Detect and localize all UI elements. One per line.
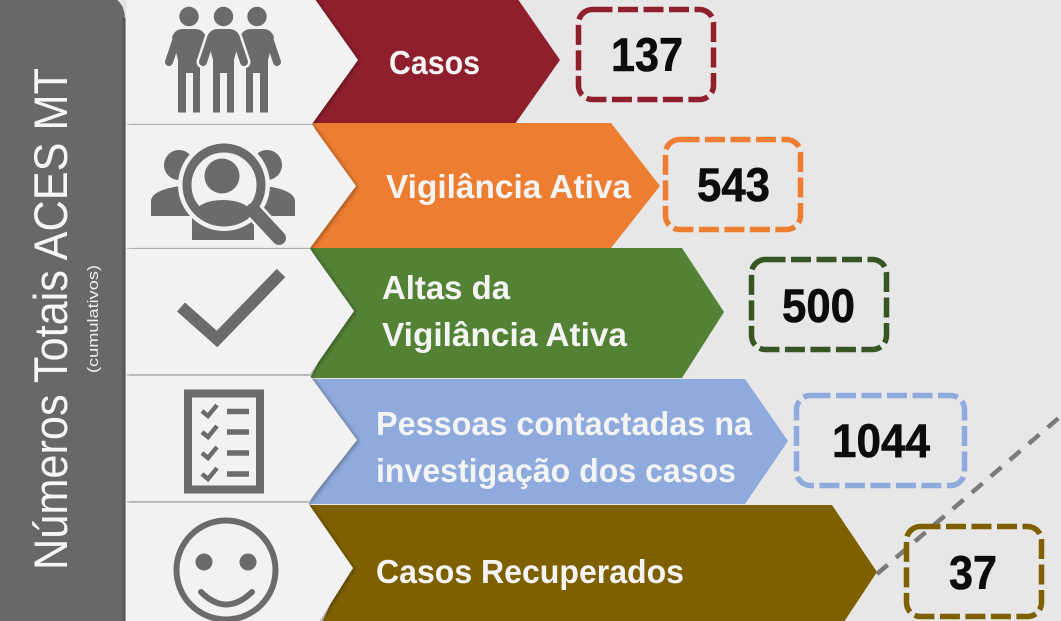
row background: Recuperados (126, 503, 353, 621)
label: Casos: Casos (389, 44, 480, 81)
arrow: Pessoas contactadas (309, 379, 788, 504)
label: Casos Recuperados: Casos Recuperados (376, 553, 684, 590)
arrow: Casos (312, 0, 560, 124)
callout: 500: 500 (782, 279, 855, 332)
panel title: Números Totais ACES MT (24, 68, 77, 570)
label: Vigilância Ativa: Vigilância Ativa (386, 168, 632, 205)
callout: 500 (752, 260, 886, 350)
label: Altas da Vigilância Ativa: Vigilância Ativa (382, 316, 628, 353)
callout: 1044 (796, 396, 964, 486)
label: Pessoas contactadas na investigação dos casos: investigação dos casos (376, 452, 736, 489)
arrow: Casos Recuperados (308, 505, 877, 621)
row background: Casos (126, 0, 358, 124)
label: Pessoas contactadas na investigação dos casos (376, 405, 753, 489)
icon: magnifier over people (151, 139, 295, 240)
arrow: Altas da Vigilância Ativa (310, 248, 724, 378)
callout: 543 (666, 140, 800, 230)
callout: 1044: 1044 (832, 414, 930, 467)
arrow: Vigilância Ativa (310, 123, 660, 248)
label: Pessoas contactadas na investigação dos casos: Pessoas contactadas na (376, 405, 753, 442)
callout: 137 (578, 10, 714, 100)
row background: Altas (126, 249, 354, 374)
label: Altas da Vigilância Ativa: Altas da (382, 269, 511, 306)
callout: 37 (906, 526, 1042, 616)
callout: 543: 543 (697, 158, 770, 211)
icon: people (169, 7, 277, 112)
icon: checklist (188, 394, 260, 490)
label: Altas da Vigilância Ativa (382, 269, 628, 353)
row background: Vigilância Ativa (126, 125, 356, 248)
icon: smiley face (176, 520, 276, 620)
left side panel (0, 0, 125, 621)
row background: Pessoas (126, 376, 357, 501)
icon: check mark (181, 273, 281, 339)
callout: 37: 37 (949, 546, 997, 599)
callout: 137: 137 (611, 28, 683, 81)
dashed diagonal line (877, 416, 1061, 574)
panel subtitle: (cumulativos) (86, 265, 102, 373)
